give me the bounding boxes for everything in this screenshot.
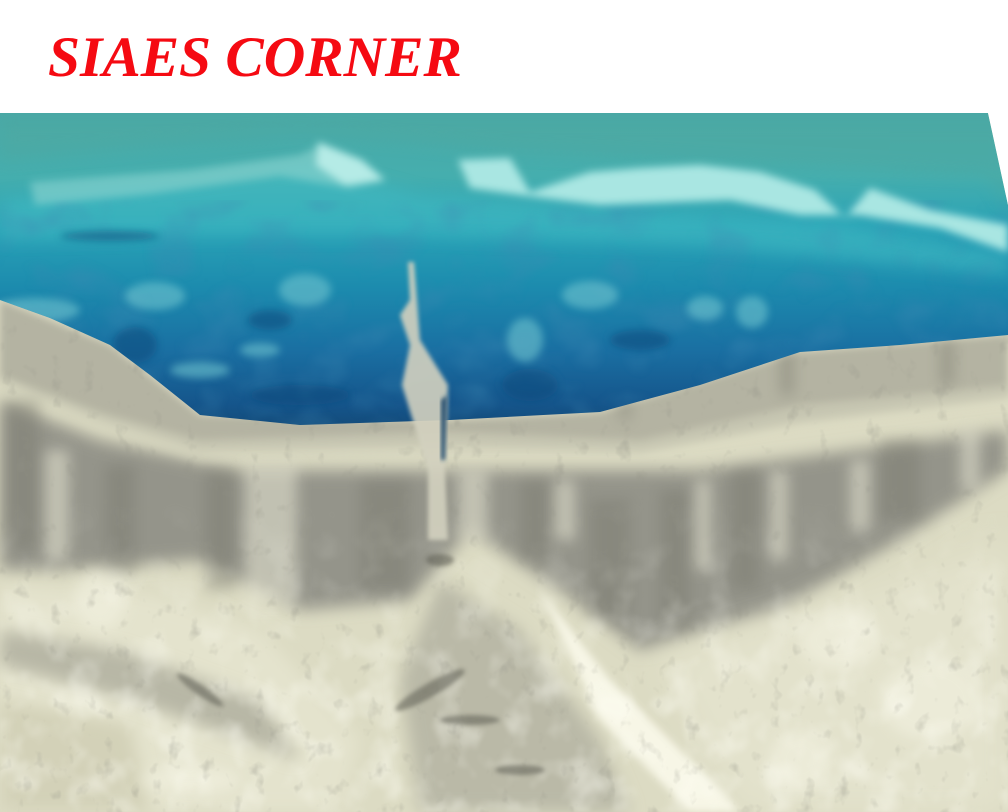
central canyon ridge bbox=[400, 262, 448, 540]
reef patches bbox=[0, 274, 768, 378]
pale lowland patches bbox=[6, 594, 350, 806]
title: SIAES CORNER bbox=[48, 26, 462, 89]
dark rocky marks bbox=[174, 554, 545, 775]
bright shelf edge bbox=[30, 142, 1008, 252]
upper slope highlights bbox=[0, 375, 1008, 462]
sea basin bbox=[0, 113, 1008, 440]
vertical streaks bbox=[5, 340, 954, 630]
